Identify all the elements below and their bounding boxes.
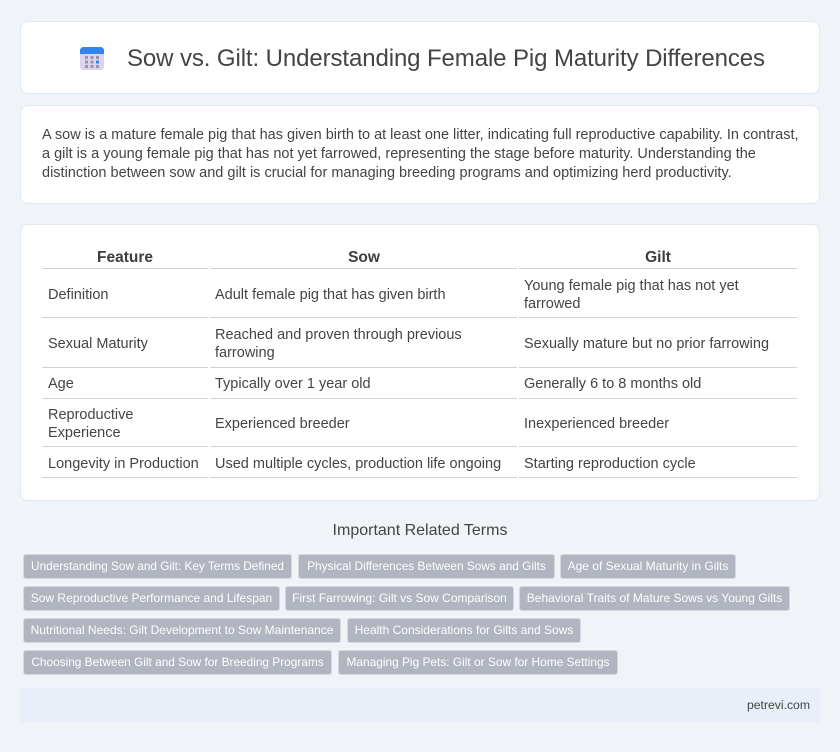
- header panel: [20, 21, 820, 94]
- footer source: petrevi.com: [747, 698, 810, 712]
- row: reproductive experience: Experience: [48, 425, 121, 441]
- row: age: Typically over 1 year old: [215, 376, 371, 392]
- intro text: [42, 126, 799, 181]
- intro text panel: [20, 105, 820, 204]
- related terms tags: Understanding Sow and Gilt: Key Terms Defined: [31, 559, 284, 573]
- row: sexual maturity: Reached and proven through previous: [215, 327, 462, 343]
- table header: Sow: [348, 249, 380, 266]
- related terms tags: Health Considerations for Gilts and Sows: [355, 623, 573, 637]
- row: definition: Young female pig that has not yet: [524, 278, 739, 294]
- title: Sow vs. Gilt: Understanding Female Pig Maturity Differences: [127, 45, 765, 72]
- footer bar: [20, 688, 820, 722]
- table header: Feature: [97, 249, 153, 266]
- row: reproductive experience: Reproductive: [48, 407, 133, 423]
- intro text: A sow is a mature female pig that has given birth to at least one litter, indicating full reproductive capability. In contrast,: [42, 126, 799, 142]
- icon: calendar: [80, 47, 104, 70]
- row: definition: [48, 278, 739, 312]
- intro text: distinction between sow and gilt is crucial for managing breeding programs and optimizing herd productivity.: [42, 165, 732, 181]
- row: reproductive experience: [48, 407, 669, 441]
- related terms tags: Physical Differences Between Sows and Gilts: [307, 559, 546, 573]
- row: definition: farrowed: [524, 296, 580, 312]
- row: definition: Definition: [48, 287, 108, 303]
- row: sexual maturity: [48, 327, 769, 361]
- row: sexual maturity: Sexual Maturity: [48, 336, 148, 352]
- comparison table panel: [20, 224, 820, 501]
- row: longevity: Longevity in Production: [48, 456, 199, 472]
- table header: [97, 249, 671, 266]
- related terms tags: Sow Reproductive Performance and Lifespan: [31, 591, 272, 605]
- row: age: [48, 376, 701, 392]
- related terms tags: [23, 554, 790, 675]
- row: longevity: Starting reproduction cycle: [524, 456, 696, 472]
- row: reproductive experience: Experienced breeder: [215, 416, 350, 432]
- related terms tags: Managing Pig Pets: Gilt or Sow for Home Settings: [346, 655, 610, 669]
- related terms tags: Behavioral Traits of Mature Sows vs Young Gilts: [527, 591, 782, 605]
- related terms tags: Choosing Between Gilt and Sow for Breeding Programs: [31, 655, 324, 669]
- intro text: a gilt is a young female pig that has not yet farrowed, representing the stage before maturity. Understanding the: [42, 146, 756, 162]
- related terms heading: Important Related Terms: [333, 522, 507, 539]
- row: age: Generally 6 to 8 months old: [524, 376, 701, 392]
- row: sexual maturity: Sexually mature but no prior farrowing: [524, 336, 769, 352]
- row: sexual maturity: farrowing: [215, 345, 275, 361]
- related terms tags: Age of Sexual Maturity in Gilts: [568, 559, 728, 573]
- row: longevity: Used multiple cycles, production life ongoing: [215, 456, 501, 472]
- related terms tags: First Farrowing: Gilt vs Sow Comparison: [292, 591, 507, 605]
- row: age: Age: [48, 376, 74, 392]
- row: definition: Adult female pig that has given birth: [215, 287, 446, 303]
- table header: Gilt: [645, 249, 671, 266]
- related terms tags: Nutritional Needs: Gilt Development to Sow Maintenance: [31, 623, 333, 637]
- row: longevity: [48, 456, 696, 472]
- row: reproductive experience: Inexperienced breeder: [524, 416, 669, 432]
